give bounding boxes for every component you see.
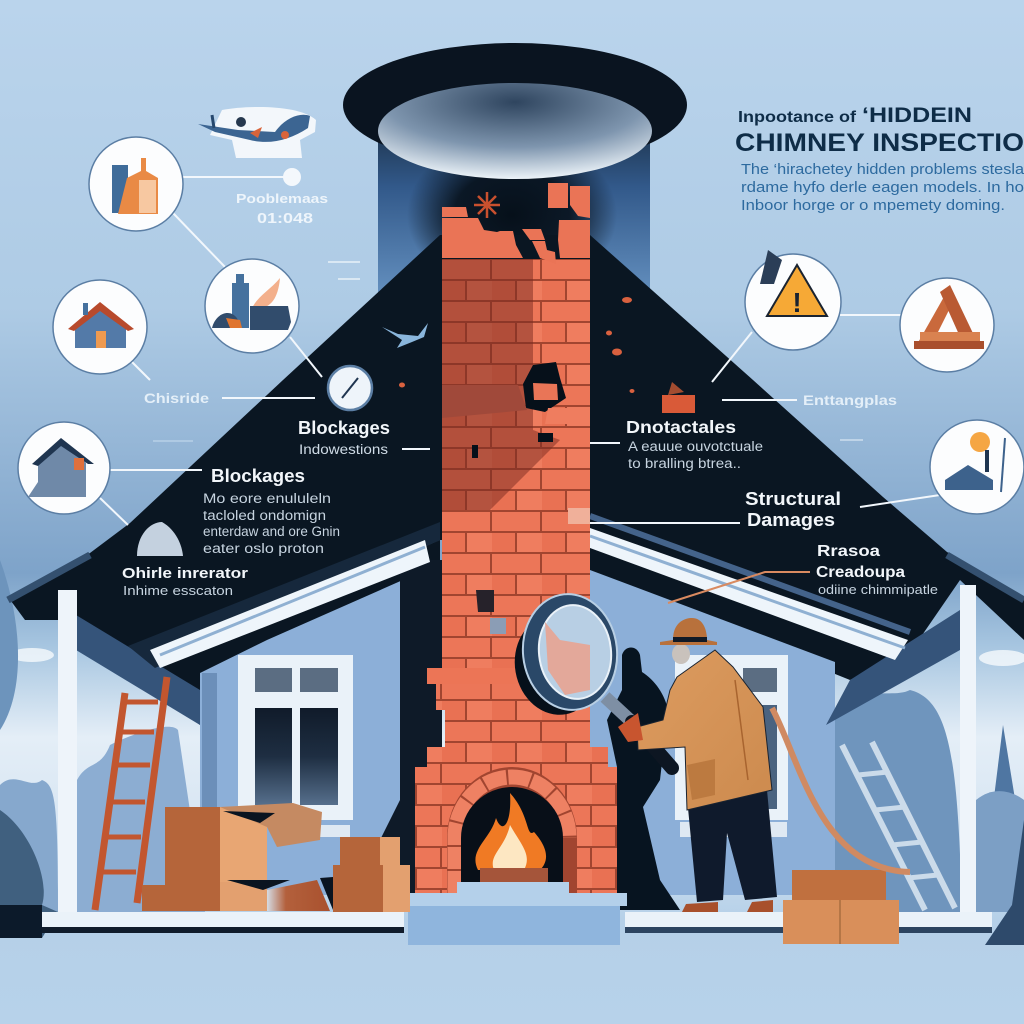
clouds (10, 648, 1024, 666)
connector lines (100, 177, 940, 603)
hat (660, 618, 717, 645)
block: blockages lower (203, 466, 340, 556)
title: CHIMNEY INSPECTIO (735, 129, 1024, 157)
block: obstacles: Dnotactales (626, 417, 736, 437)
block: chimney inspector: Ohirle inrerator (122, 565, 248, 582)
marker dot (283, 168, 301, 186)
black eave stripe right (590, 545, 895, 680)
label: chisride: Chisride (144, 390, 209, 406)
icon: rubble (137, 522, 183, 556)
porch floor (42, 912, 992, 933)
icon: bird (382, 323, 428, 348)
icon: airplane (198, 107, 316, 158)
stat label: Pooblemaas (236, 192, 328, 206)
block: blockages lower: eater oslo proton (203, 541, 324, 556)
cardboard boxes left (142, 803, 410, 912)
block: chimney inspector: Inhime esscaton (123, 583, 233, 598)
flue shadow (407, 135, 617, 295)
icon circle: warning triangle: ! (792, 287, 802, 318)
head (672, 644, 690, 664)
block: obstacles: A eauue ouvotctuale (628, 439, 763, 454)
block: blockages upper (298, 418, 390, 457)
icon circle: warning triangle (745, 250, 841, 350)
inspector with magnifying glass (507, 589, 910, 912)
magnifier rim (517, 589, 623, 715)
right ladder (842, 742, 955, 910)
block: reasons (816, 543, 938, 597)
right window (675, 655, 788, 837)
hand (618, 713, 643, 742)
hose (772, 708, 910, 872)
icon: pressure gauge (328, 366, 372, 410)
roof ridge edges (8, 555, 1024, 600)
intro text: The ‘hirachetey hidden problems stesla (741, 162, 1024, 178)
block: reasons: Creadoupa (816, 564, 905, 581)
icon circle: wood stack (900, 278, 994, 372)
magnifier handle (605, 697, 632, 722)
block: blockages upper: Blockages (298, 418, 390, 438)
coat (637, 650, 772, 810)
fallen brick fragments (399, 297, 634, 393)
left wall column (202, 673, 217, 895)
intro text: rdame hyfo derle eagen models. In ho (741, 180, 1024, 196)
block: blockages lower: enterdaw and ore Gnin (203, 524, 340, 539)
fireplace (415, 767, 617, 893)
cracked cavities (523, 362, 566, 412)
block: blockages upper: Indowestions (299, 442, 388, 457)
block: reasons: Rrasoa (817, 543, 880, 560)
icon: red toolbox (662, 382, 695, 413)
left soffit (76, 615, 200, 725)
label: entanglements: Enttangplas (803, 392, 897, 408)
arch (447, 767, 577, 893)
block: reasons: odiine chimmipatle (818, 582, 938, 597)
stat label: 01:048 (257, 210, 313, 227)
legs (688, 790, 777, 902)
block: chimney inspector (122, 565, 248, 598)
hearth (402, 882, 627, 945)
left ladder (95, 677, 167, 910)
icon circle: house with sun (930, 420, 1024, 514)
block: structural damages: Structural (745, 489, 841, 509)
flue cap (343, 43, 687, 167)
right fascia board (590, 516, 910, 660)
block: structural damages: Damages (747, 510, 835, 530)
block: structural damages (745, 489, 841, 530)
block: blockages lower: Blockages (211, 466, 305, 486)
chimney mantel (427, 668, 608, 767)
icon circle: chimney fire (205, 259, 299, 353)
top brick rubble (442, 183, 590, 264)
icon circle: house (53, 280, 147, 374)
icon: soot burst (474, 192, 500, 218)
block: obstacles (626, 417, 763, 471)
block: blockages lower: tacloled ondomign (203, 508, 326, 523)
house walls (76, 540, 960, 895)
block: obstacles: to bralling btrea.. (628, 456, 741, 471)
icon circle: boiler (89, 137, 183, 231)
title (735, 104, 1024, 157)
flue opening (378, 83, 652, 179)
title: Inpootance of (738, 109, 857, 126)
shaded diagonal (442, 259, 560, 510)
left window (238, 655, 353, 837)
cardboard boxes right (783, 870, 899, 944)
block: blockages lower: Mo eore enululeln (203, 491, 331, 506)
magnifier shadow (507, 608, 607, 722)
magnifier lens (534, 601, 616, 703)
right soffit (826, 610, 960, 725)
stat label (236, 192, 328, 227)
left fascia board (128, 522, 440, 668)
roof (8, 235, 1024, 668)
brick chimney stack (442, 183, 590, 679)
intro text (741, 162, 1024, 214)
intro text: Inboor horge or o mpemety doming. (741, 198, 1005, 214)
title: ‘HIDDEIN (862, 104, 972, 127)
icon circle: cabin (18, 422, 110, 514)
background bushes and trees (0, 560, 1024, 945)
chimney flue cylinder (343, 43, 687, 320)
inspector shadow on wall (607, 648, 680, 910)
porch posts (58, 585, 976, 912)
dark wall edge beside chimney (380, 560, 442, 895)
shoes (682, 902, 718, 912)
fire (475, 793, 546, 870)
